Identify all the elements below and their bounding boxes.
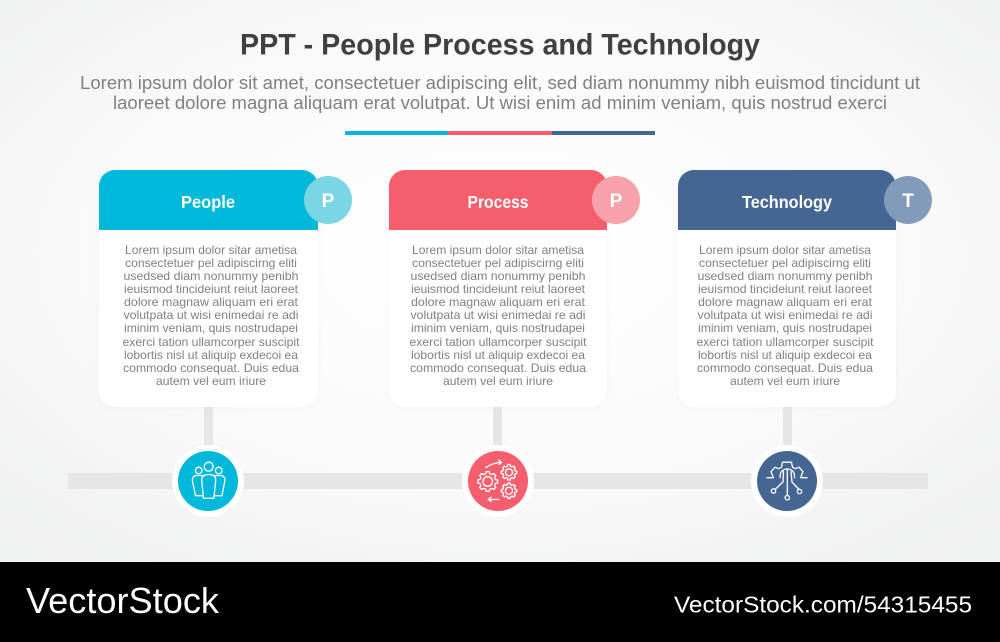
subtitle: Lorem ipsum dolor sit amet, consectetuer adipiscing elit, sed diam nonummy nibh euismod tincidunt ut xyxy=(80,72,920,93)
body text: commodo consequat. Duis edua xyxy=(123,362,300,375)
card header xyxy=(678,170,896,230)
badge: P xyxy=(322,191,335,212)
body text: exerci tation ullamcorper suscipit xyxy=(410,336,587,349)
connector: people xyxy=(204,407,213,447)
body text: dolore magnaw aliquam eri erat xyxy=(698,296,873,309)
heading: People xyxy=(181,192,235,212)
title: PPT - People Process and Technology xyxy=(240,28,760,62)
body text: usedsed diam nonummy penibh xyxy=(698,270,872,283)
body text xyxy=(410,244,587,388)
body text: autem vel eum iriure xyxy=(730,375,840,388)
badge xyxy=(884,176,932,224)
body text: commodo consequat. Duis edua xyxy=(697,362,874,375)
heading: Process xyxy=(468,192,529,212)
body text: volutpata ut wisi enimedai re adi xyxy=(410,309,586,322)
body text: dolore magnaw aliquam eri erat xyxy=(124,296,299,309)
body text: ieuismod tincideiunt reiut laoreet xyxy=(411,283,586,296)
subtitle: laoreet dolore magna aliquam erat volutpat. Ut wisi enim ad minim veniam, quis nostrud exerci xyxy=(113,92,887,113)
body text: Lorem ipsum dolor sitar ametisa xyxy=(125,244,298,257)
timeline bar xyxy=(68,473,928,489)
body text: lobortis nisl ut aliquip exdecoi ea xyxy=(124,349,299,362)
connector: process xyxy=(493,407,502,447)
panel: process xyxy=(389,170,640,407)
body text xyxy=(122,244,300,388)
body text: volutpata ut wisi enimedai re adi xyxy=(124,309,298,322)
card header xyxy=(389,170,607,230)
body text: Lorem ipsum dolor sitar ametisa xyxy=(699,244,872,257)
body text: ieuismod tincideiunt reiut laoreet xyxy=(698,283,873,296)
icon: technology gear circuit xyxy=(751,445,823,517)
body text: volutpata ut wisi enimedai re adi xyxy=(698,309,872,322)
body text: iminim veniam, quis nostrudapei xyxy=(411,322,585,335)
body text: ieuismod tincideiunt reiut laoreet xyxy=(124,283,299,296)
card body xyxy=(678,170,896,407)
body text: commodo consequat. Duis edua xyxy=(410,362,587,375)
connector: technology xyxy=(783,407,792,447)
body text: lobortis nisl ut aliquip exdecoi ea xyxy=(411,349,586,362)
panel: technology xyxy=(678,170,932,407)
body text: consectetuer pel adipiscirng eliti xyxy=(699,257,871,270)
panel: people xyxy=(99,170,352,407)
card body xyxy=(389,170,607,407)
body text xyxy=(696,244,874,388)
body text: dolore magnaw aliquam eri erat xyxy=(411,296,586,309)
heading: Technology xyxy=(742,192,832,212)
body text: lobortis nisl ut aliquip exdecoi ea xyxy=(698,349,873,362)
body text: consectetuer pel adipiscirng eliti xyxy=(412,257,584,270)
footer logo: VectorStock xyxy=(26,580,220,621)
body text: iminim veniam, quis nostrudapei xyxy=(124,322,298,335)
card header xyxy=(99,170,318,230)
icon: people xyxy=(172,445,244,517)
badge xyxy=(304,176,352,224)
body text: exerci tation ullamcorper suscipit xyxy=(696,336,874,349)
badge: P xyxy=(610,191,623,212)
body text: usedsed diam nonummy penibh xyxy=(124,270,298,283)
footer bar xyxy=(0,562,1000,642)
badge xyxy=(592,176,640,224)
tricolor divider xyxy=(345,131,655,135)
body text: autem vel eum iriure xyxy=(443,375,553,388)
footer url: VectorStock.com/54315455 xyxy=(674,592,972,618)
subtitle xyxy=(80,72,920,113)
badge: T xyxy=(902,191,914,212)
card body xyxy=(99,170,318,407)
body text: Lorem ipsum dolor sitar ametisa xyxy=(412,244,585,257)
body text: autem vel eum iriure xyxy=(156,375,266,388)
icon: process gears xyxy=(462,445,534,517)
body text: consectetuer pel adipiscirng eliti xyxy=(125,257,297,270)
body text: iminim veniam, quis nostrudapei xyxy=(698,322,872,335)
body text: usedsed diam nonummy penibh xyxy=(410,270,586,283)
body text: exerci tation ullamcorper suscipit xyxy=(122,336,300,349)
